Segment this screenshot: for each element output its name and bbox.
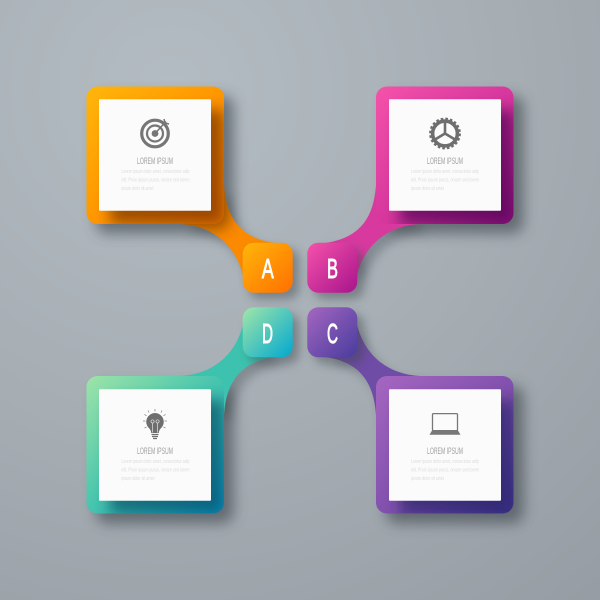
- button D: [243, 307, 299, 364]
- heading A: LOREM IPSUM: [137, 156, 173, 167]
- icon: gear: [430, 119, 460, 148]
- body text D: [122, 459, 190, 482]
- body text C: ipsum dolor sit amet: [411, 476, 444, 482]
- button C: C: [327, 318, 338, 349]
- body text D: Lorem ipsum dolor amet, consectetur adip: [122, 459, 190, 465]
- button C: [307, 307, 364, 364]
- body text B: elit. Proin ipsum purus, ornare sed lorem: [411, 177, 479, 183]
- button A: A: [262, 253, 274, 284]
- body text A: ipsum dolor sit amet: [122, 186, 154, 192]
- body text C: elit. Proin ipsum purus, ornare sed lorem: [411, 467, 479, 473]
- heading B: LOREM IPSUM: [427, 156, 463, 167]
- button D: D: [262, 318, 273, 349]
- body text A: [122, 169, 190, 192]
- button B: B: [327, 253, 338, 284]
- panel B: [325, 86, 524, 283]
- body text B: ipsum dolor sit amet: [411, 186, 444, 192]
- body text D: elit. Proin ipsum purus, ornare sed lorem: [122, 467, 190, 473]
- button A: [243, 243, 299, 299]
- body text C: Lorem ipsum dolor amet, consectetur adip: [411, 459, 479, 465]
- panel D: [86, 325, 282, 524]
- button B: [307, 243, 364, 299]
- icon: laptop: [430, 414, 460, 435]
- icon: target: [142, 119, 169, 147]
- card B: [389, 99, 501, 211]
- body text B: Lorem ipsum dolor amet, consectetur adip: [411, 169, 479, 175]
- body text C: [411, 459, 479, 482]
- card C: [389, 389, 501, 501]
- body text D: ipsum dolor sit amet: [122, 476, 155, 482]
- panel C: [325, 325, 524, 524]
- icon: light bulb: [143, 409, 167, 438]
- panel A: [86, 86, 282, 283]
- body text B: [411, 169, 479, 192]
- heading C: LOREM IPSUM: [427, 446, 463, 457]
- card A: [99, 99, 211, 211]
- card D: [99, 389, 211, 501]
- body text A: elit. Proin ipsum purus, ornare sed lorem: [122, 177, 190, 183]
- body text A: Lorem ipsum dolor amet, consectetur adip: [122, 169, 190, 175]
- heading D: LOREM IPSUM: [137, 446, 173, 457]
